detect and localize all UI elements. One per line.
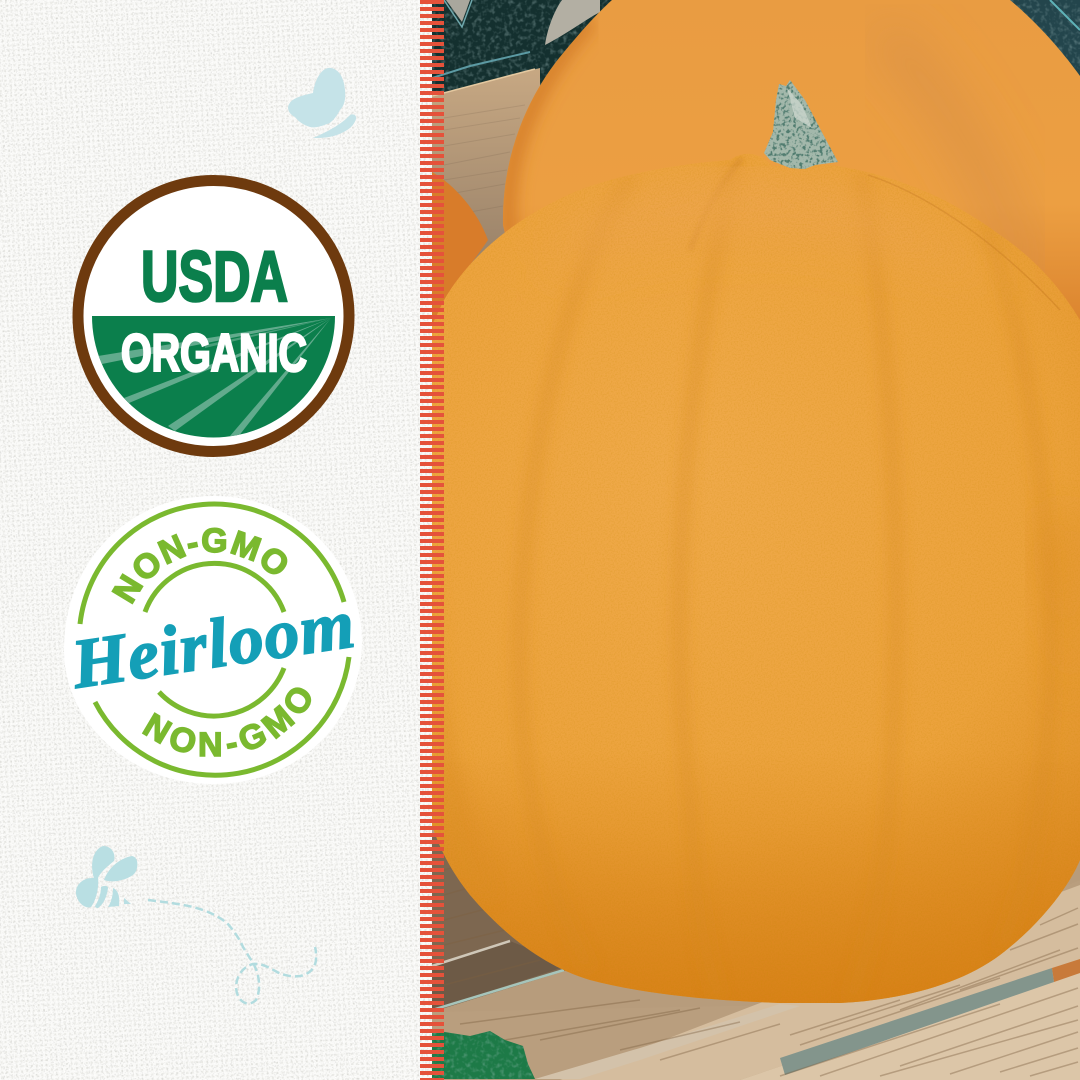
stamp script word: Heirloom: Heirloom [66,586,359,704]
pumpkin stem [764,80,838,169]
seal word: ORGANIC: ORGANIC [121,324,307,383]
background: lower crate wood [432,800,1080,1080]
green field with rays [90,316,340,440]
icon: butterfly [288,68,356,138]
seal word: USDA: USDA [141,238,288,317]
icon: green leaf [432,1030,537,1080]
stamp text: top NON-GMO: NON-GMO [111,528,288,604]
flight path [148,900,316,1003]
bee wings and body [76,846,137,908]
stamp rings [80,504,349,775]
badge: Non-GMO Heirloom stamp [64,496,362,784]
photo: pumpkins on a wooden crate [432,0,1080,1080]
seal ring [78,180,349,452]
stamp text: bottom NON-GMO: NON-GMO [142,687,312,757]
stamp white backing [64,496,362,784]
panel: fabric background [0,0,432,1080]
wood grain lines [460,908,1078,1077]
icon: bee with dashed flight path [76,846,316,1003]
back pumpkin [503,0,1080,340]
decorative strip: red stitched edge [420,0,444,1080]
badge: USDA Organic seal [78,180,349,452]
main pumpkin [432,150,1080,1010]
background: upper crate wood [432,68,540,264]
background: dark leaves [432,0,1080,96]
pumpkin ribs and shading [432,150,1080,1010]
small pumpkin at left [432,172,488,330]
